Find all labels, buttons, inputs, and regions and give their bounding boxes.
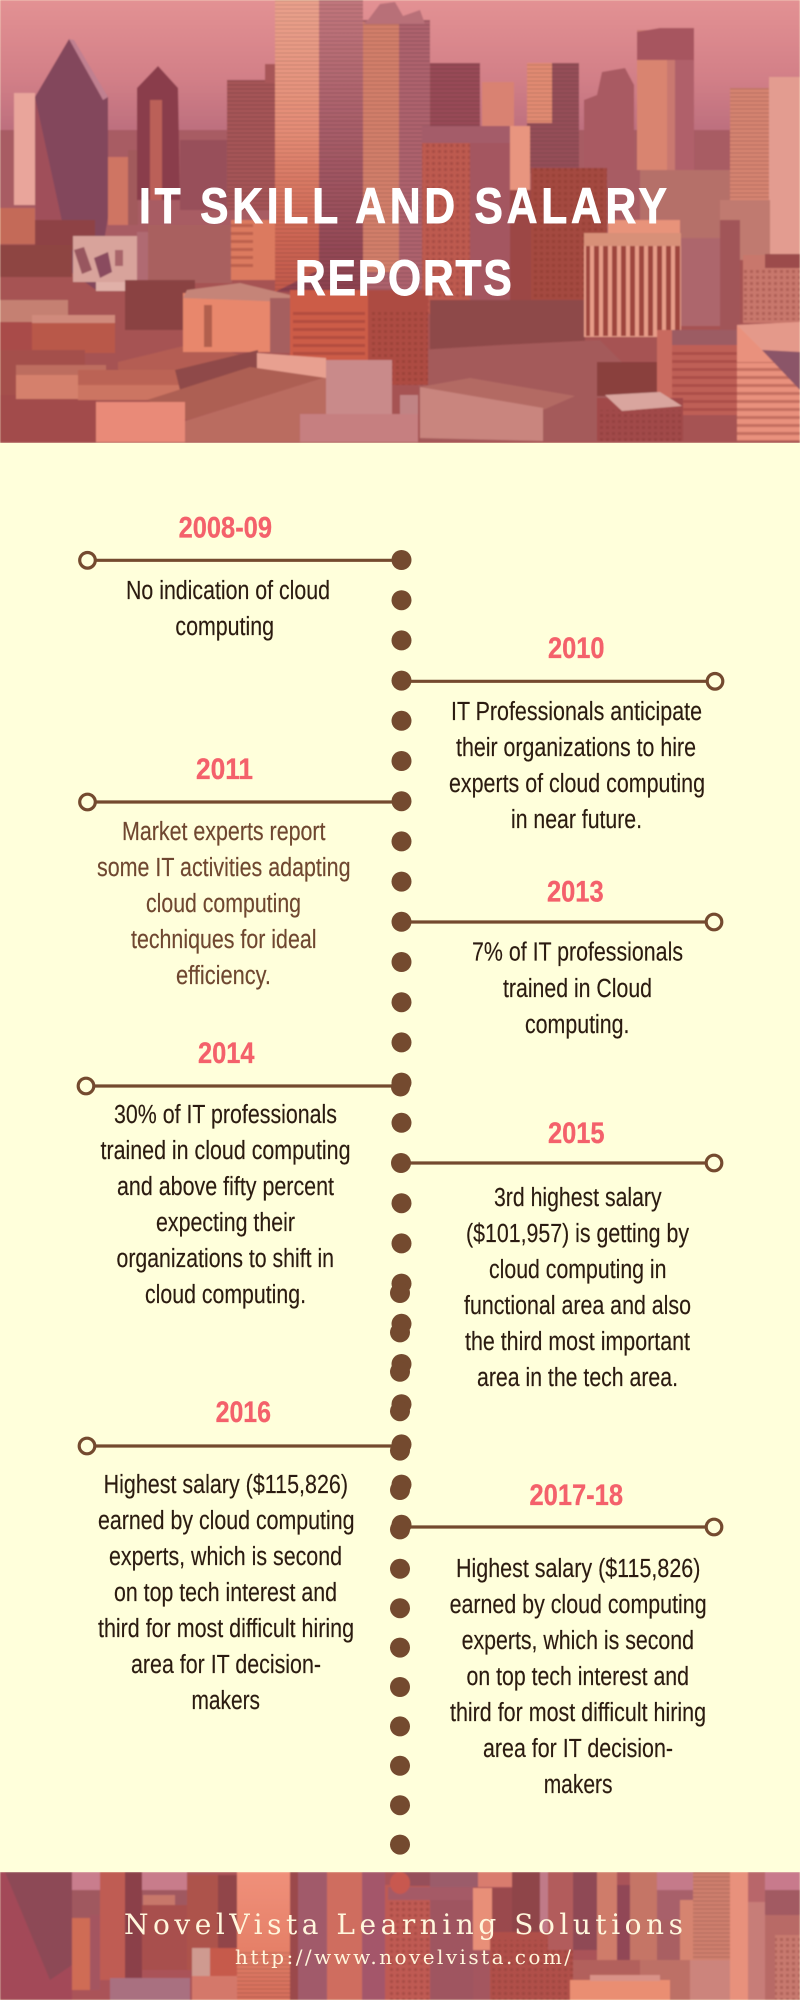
entry: 2015: 3rd highest salary [494,1184,662,1212]
header skyline photo [0,0,800,443]
entry: 2011 [80,753,392,990]
entry: 2014: trained in cloud computing [100,1137,350,1165]
timeline dots [390,550,412,1855]
entry: 2011: techniques for ideal [131,926,316,954]
entry: 2014: and above fifty percent [117,1173,334,1201]
entry: 2013: 7% of IT professionals [472,939,683,967]
entry: 2016: 2016 [216,1396,271,1429]
entry: 2016: on top tech interest and [114,1579,337,1607]
entry: 2017-18: area for IT decision- [483,1735,673,1763]
entry: 2013: trained in Cloud [503,975,652,1003]
entry: 2015 [410,1117,722,1392]
footer skyline band [0,1872,800,2000]
entry: 2016: makers [192,1687,260,1715]
entry: 2017-18: third for most difficult hiring [450,1699,706,1727]
entry: 2008-09: 2008-09 [179,512,272,544]
entry: 2017-18: makers [544,1771,612,1799]
entry: 2015: cloud computing in [489,1256,666,1284]
footer text: NovelVista Learning Solutions [124,1908,683,1941]
entry: 2017-18: Highest salary ($115,826) [456,1555,700,1583]
entry: 2010: their organizations to hire [456,734,696,762]
entry: 2010: experts of cloud computing [449,770,705,798]
entry: 2017-18: on top tech interest and [466,1663,689,1691]
lower ground [430,300,585,390]
footer text: http://www.novelvista.com/ [235,1945,571,1969]
title: IT SKILL AND SALARY [139,178,667,234]
entry: 2014: cloud computing. [145,1281,306,1309]
entry: 2011: 2011 [196,753,253,786]
title: REPORTS [295,250,512,306]
title [139,178,667,306]
entry: 2008-09: No indication of cloud [126,577,330,605]
entry: 2015: ($101,957) is getting by [466,1220,689,1248]
entry: 2014: organizations to shift in [116,1245,334,1273]
entry: 2010: 2010 [548,632,604,665]
entry: 2017-18: earned by cloud computing [450,1591,707,1619]
entry: 2017-18: experts, which is second [462,1627,694,1655]
entry: 2015: area in the tech area. [477,1364,678,1392]
entry: 2017-18: 2017-18 [530,1479,623,1512]
entry: 2008-09 [80,512,392,641]
entry: 2016: third for most difficult hiring [98,1615,354,1643]
entry: 2013 [410,876,722,1039]
entry: 2015: 2015 [548,1117,604,1150]
entry: 2011: efficiency. [176,962,271,990]
entry: 2017-18 [410,1479,722,1799]
entry: 2013: computing. [525,1011,630,1039]
entry: 2014: expecting their [156,1209,295,1237]
entry: 2013: 2013 [547,876,604,909]
entry: 2014 [78,1037,392,1309]
entry: 2010: in near future. [511,806,642,834]
footer text [124,1908,683,1969]
entry: 2016: Highest salary ($115,826) [104,1471,348,1499]
entry: 2016: experts, which is second [109,1543,342,1571]
entry: 2011: Market experts report [122,818,326,846]
entry: 2016: earned by cloud computing [98,1507,354,1535]
entry: 2010: IT Professionals anticipate [451,698,702,726]
entry: 2011: some IT activities adapting [97,854,350,882]
entry: 2016: area for IT decision- [131,1651,321,1679]
entry: 2014: 30% of IT professionals [114,1101,337,1129]
entry: 2011: cloud computing [146,890,301,918]
entry: 2015: functional area and also [464,1292,691,1320]
entry: 2016 [79,1396,392,1715]
entry: 2010 [410,632,723,834]
entry: 2014: 2014 [198,1037,255,1070]
entry: 2008-09: computing [175,613,274,641]
entry: 2015: the third most important [465,1328,690,1356]
